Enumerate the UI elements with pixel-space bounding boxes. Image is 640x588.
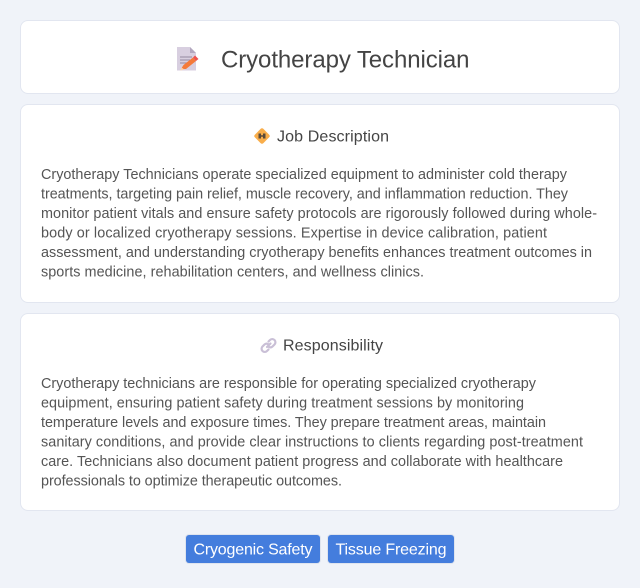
heading: job description: Job Description <box>277 128 389 146</box>
tag: cryogenic safety <box>186 535 320 563</box>
panel: title card <box>20 20 620 94</box>
text block: job description: sports medicine, rehabilitation centers, and wellness clinics. <box>41 264 424 280</box>
text block: job description <box>41 167 597 280</box>
text block: responsibility <box>41 376 583 490</box>
text block: responsibility: professionals to optimize therapeutic outcomes. <box>41 474 342 490</box>
text block: responsibility: sanitary conditions, and provide clear instructions to clients regarding post-treatment <box>41 434 583 450</box>
text block: responsibility: care. Technicians also document patient progress and collaborate with healthcare <box>41 454 563 470</box>
icon: memo with pencil <box>177 47 198 70</box>
tag: cryogenic safety: Cryogenic Safety <box>194 542 312 558</box>
panel: responsibility <box>20 313 620 511</box>
text block: job description: Cryotherapy Technicians operate specialized equipment to administer cold therapy <box>41 167 568 183</box>
tag: tissue freezing: Tissue Freezing <box>336 542 446 558</box>
text block: responsibility: Cryotherapy technicians are responsible for operating specialized cryotherapy <box>41 376 537 392</box>
heading: responsibility: Responsibility <box>283 338 383 354</box>
icon: job description diamond <box>254 128 270 144</box>
text block: job description: treatments, targeting pain relief, muscle recovery, and inflammation reduction. They <box>41 186 569 202</box>
icon: link <box>260 338 276 353</box>
panel: job description <box>20 104 620 303</box>
text block: job description: monitor patient vitals and ensure safety protocols are rigorously followed during whole- <box>41 206 597 222</box>
tag: tissue freezing <box>328 535 454 563</box>
text block: responsibility: equipment, ensuring patient safety during treatment sessions by monitoring <box>41 396 524 412</box>
title: Cryotherapy Technician <box>221 46 470 74</box>
text block: responsibility: temperature levels and exposure times. They prepare treatment areas, maintain <box>41 415 546 431</box>
text block: job description: assessment, and understanding cryotherapy benefits enhances treatment outcomes in <box>41 245 592 261</box>
text block: job description: body or localized cryotherapy sessions. Expertise in device calibration, patient <box>41 226 547 242</box>
